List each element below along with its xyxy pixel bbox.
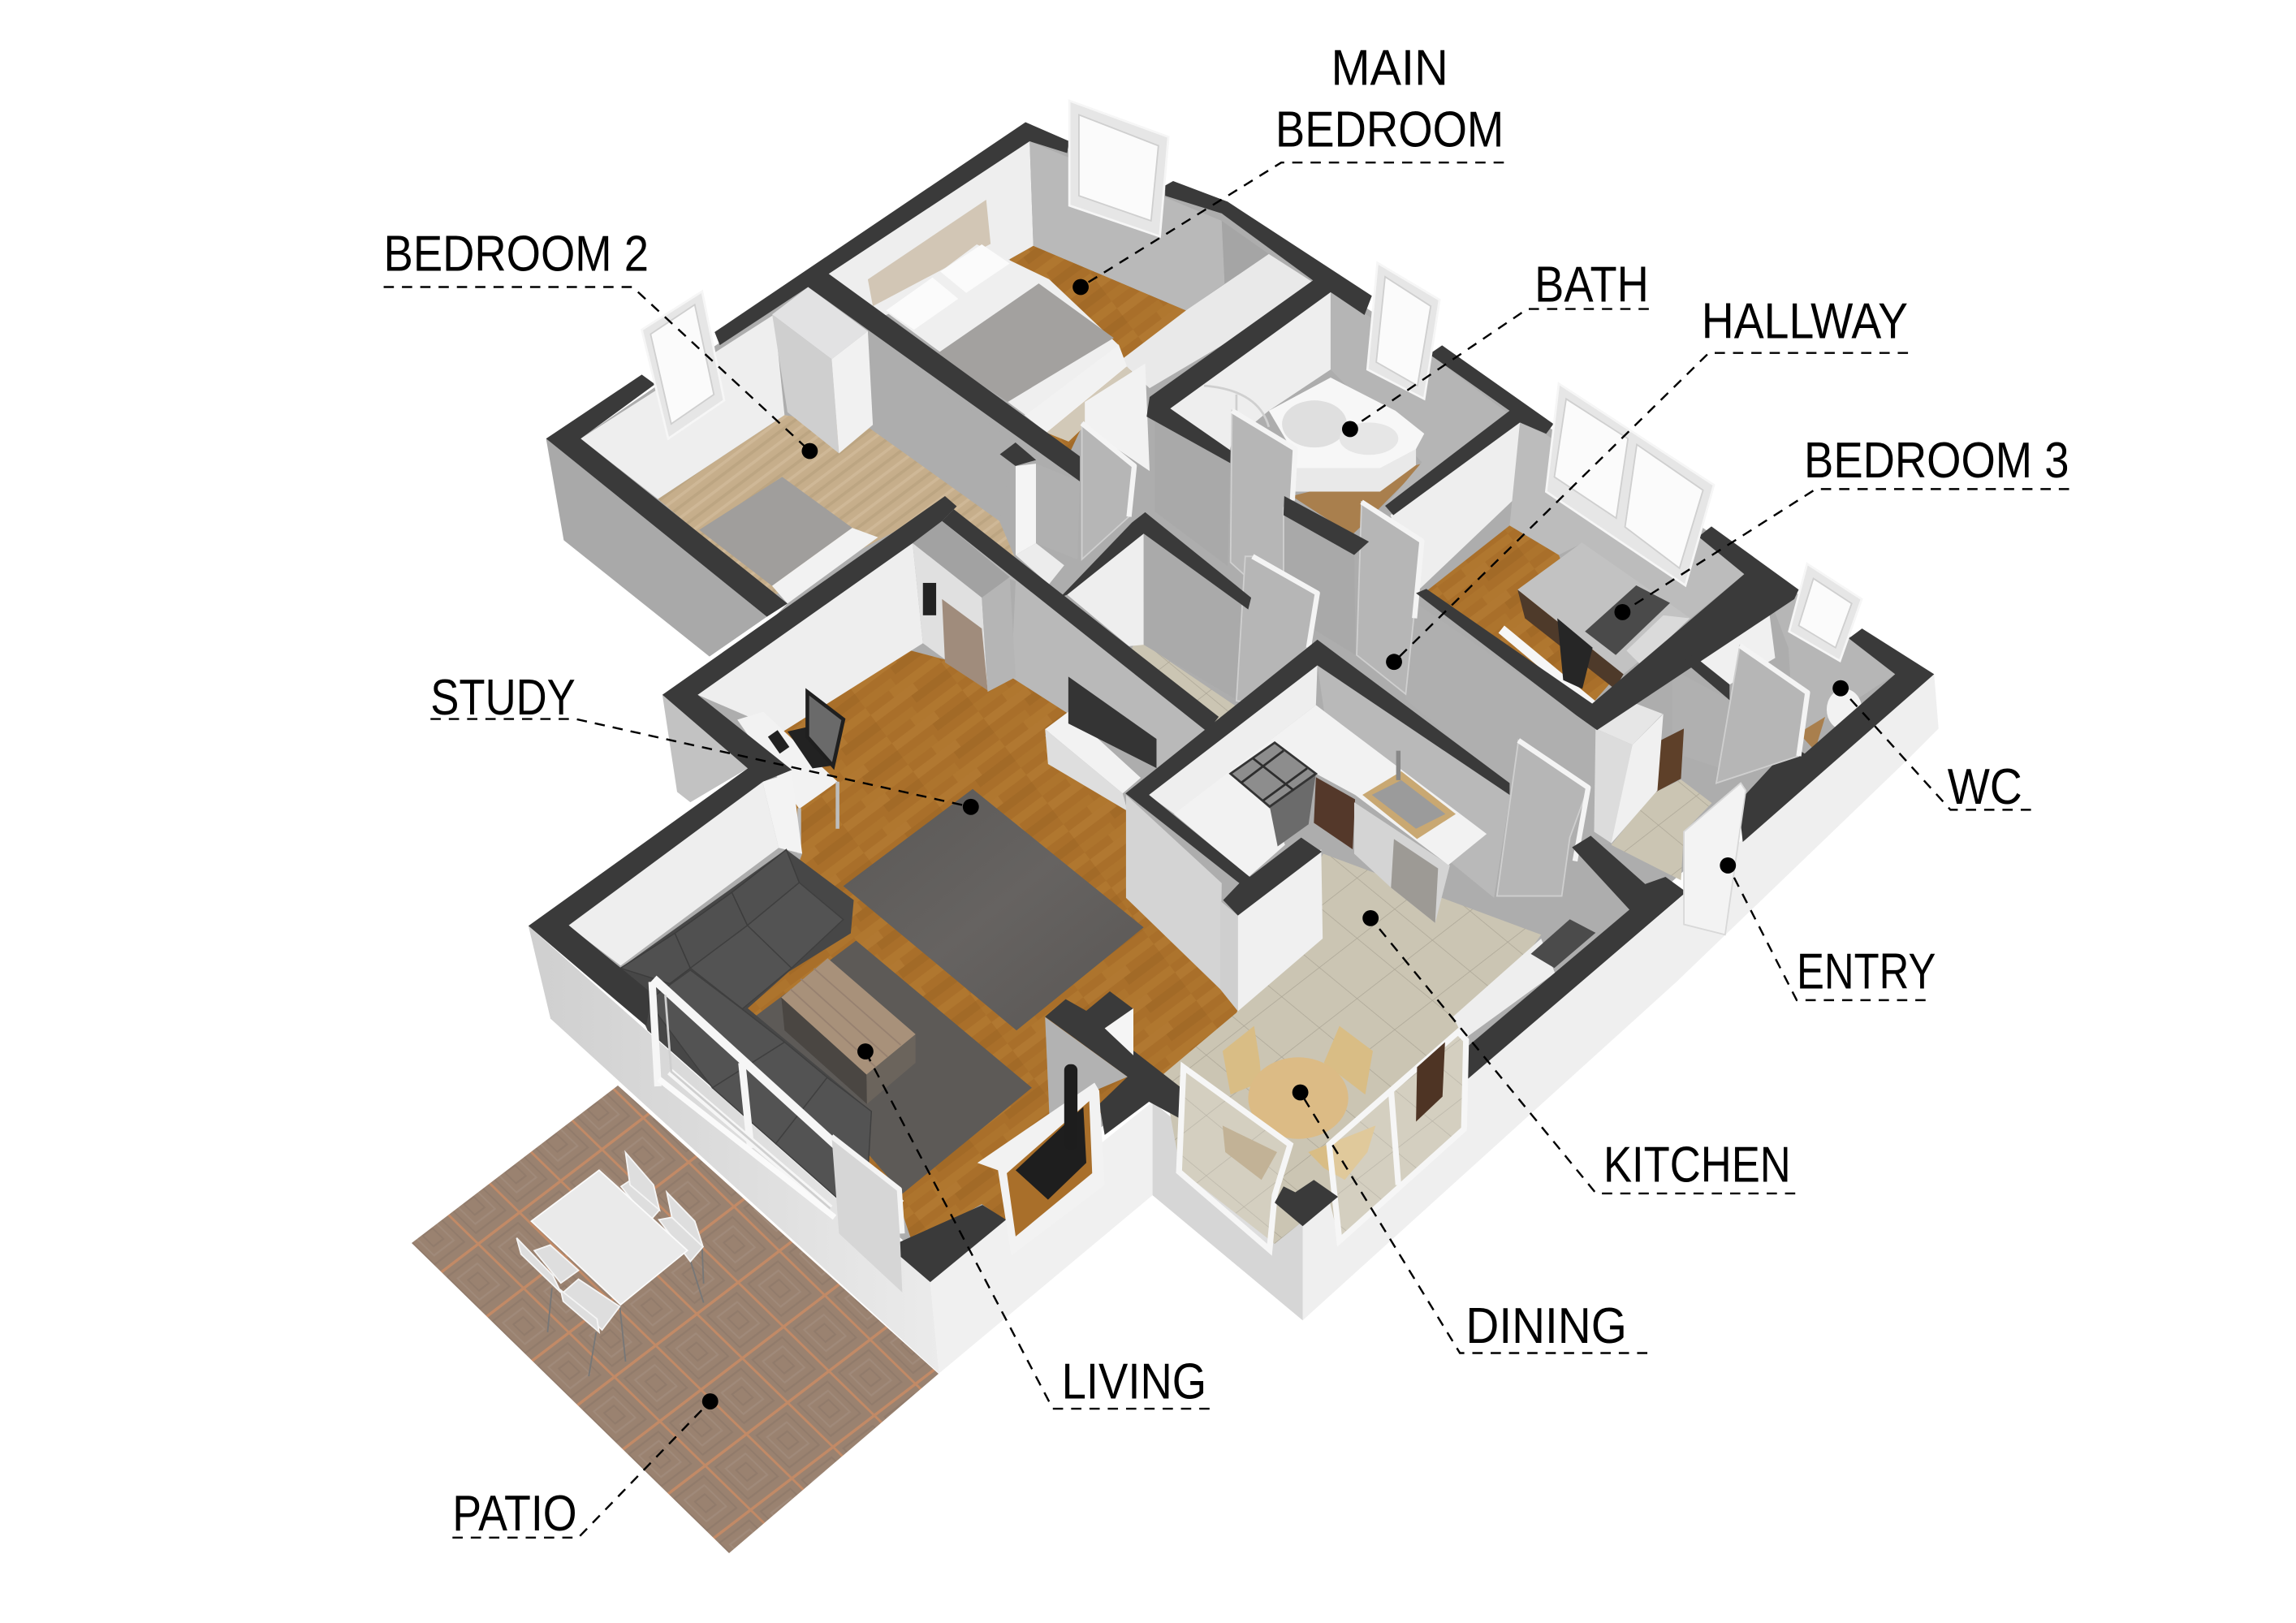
window: bedroom 3 [1546, 383, 1714, 585]
label: dining: DINING [1465, 1298, 1627, 1354]
label: bedroom 3: BEDROOM 3 [1804, 433, 2069, 489]
room: closet floor [1129, 639, 1236, 728]
side wall [868, 334, 1015, 520]
room: kitchen floor [1163, 854, 1541, 1244]
white wall [1391, 422, 1522, 589]
cap: bedroom 2 corner [546, 374, 788, 617]
wall caps [529, 122, 1934, 1282]
living room walls and furniture [568, 521, 1207, 1200]
room: entry floor [1612, 779, 1712, 880]
lower seat cushion [648, 970, 784, 1088]
label: bath: BATH [1534, 257, 1649, 313]
windows and doors [641, 101, 1862, 1293]
chair [516, 1238, 579, 1293]
round table [1248, 1057, 1349, 1139]
main bedroom walls and furniture [829, 141, 1320, 442]
bed [868, 200, 1137, 442]
bedroom 2 walls and furniture [580, 287, 1080, 603]
hallway and door walls [1067, 364, 1610, 848]
cap: living to hall [942, 509, 1219, 732]
long hall wall [1405, 596, 1610, 848]
exterior wall: dining side [1153, 1102, 1303, 1320]
right wall [923, 521, 1207, 768]
label: bedroom 3 [1614, 433, 2069, 620]
label: bedroom 2 [384, 227, 818, 459]
label: bedroom 2: BEDROOM 2 [384, 227, 649, 283]
bathtub [1269, 378, 1424, 492]
cap: bath lower [1284, 496, 1369, 555]
chair [1223, 1026, 1262, 1094]
exterior wall: living room front [930, 1102, 1153, 1374]
label: patio: PATIO [452, 1486, 577, 1542]
window: living small [978, 1064, 1105, 1255]
service column [1594, 700, 1684, 844]
interior underlay [568, 132, 1899, 1266]
WC walls and fixtures [1672, 589, 1895, 768]
closet gray wall [1144, 533, 1248, 706]
hob counter [1453, 939, 1555, 1039]
back wall [1170, 292, 1331, 453]
lower cabinet and dishwasher [1314, 777, 1450, 923]
label: study [430, 670, 979, 815]
cap: kitchen surround [1125, 640, 1322, 916]
bed [699, 477, 878, 603]
sink [1362, 751, 1456, 839]
back wall [829, 141, 1034, 324]
bath partition [1154, 417, 1230, 566]
label: hallway: HALLWAY [1702, 294, 1908, 350]
wall column [762, 773, 802, 854]
counter top [1174, 705, 1487, 877]
chair [659, 1193, 703, 1262]
window: WC [1789, 563, 1862, 661]
window: bedroom 2 [641, 291, 724, 438]
main rug [844, 789, 1144, 1030]
label: study: STUDY [430, 670, 576, 726]
chair [1324, 1026, 1373, 1094]
kitchen pillar [1220, 849, 1323, 1012]
label: bath [1342, 257, 1649, 437]
label: living [857, 1043, 1210, 1409]
chair [1223, 1125, 1277, 1180]
dining set [1223, 1026, 1375, 1180]
label: dining [1293, 1085, 1647, 1354]
lower seat cushion [712, 1042, 827, 1144]
door: closet [1236, 556, 1318, 704]
lower seat cushion [775, 1077, 871, 1200]
cap: bedroom 2 stub [1000, 442, 1036, 466]
cap: bedroom 3 surround [1416, 526, 1798, 730]
chair [561, 1279, 619, 1332]
patio dining set [516, 1153, 704, 1376]
label: WC: WC [1948, 759, 2022, 815]
kitchen walls and fittings [1126, 665, 1684, 1039]
room: bedroom 2 floor [658, 415, 1016, 596]
label: entry [1720, 857, 1936, 1000]
WC door [1716, 645, 1807, 783]
cap: WC outer [1738, 628, 1934, 842]
side wall [1331, 292, 1509, 506]
hob [1531, 919, 1595, 968]
room: main bedroom floor [1010, 246, 1186, 452]
kitchen outer side wall [1126, 795, 1222, 989]
TV unit [1045, 676, 1156, 811]
chair [621, 1153, 659, 1222]
back wall white [1148, 665, 1318, 814]
cap: main bedroom to bath [1146, 181, 1372, 463]
bed [1517, 542, 1690, 688]
table [531, 1170, 688, 1305]
label: kitchen [1362, 910, 1795, 1194]
door: bath [1231, 411, 1295, 611]
kitchen door [1497, 740, 1588, 896]
cap: WC divider [1683, 655, 1729, 700]
bath walls and fixtures [1170, 292, 1509, 506]
cap: north outer wall [714, 122, 1080, 481]
cap: dining corner [1275, 1180, 1338, 1226]
door panel white [1085, 364, 1150, 471]
wardrobe [772, 287, 873, 453]
label: main bedroom [1072, 41, 1504, 295]
exterior wall: bedroom 2 side [546, 438, 767, 657]
door bedroom hall [1082, 423, 1134, 559]
label: kitchen: KITCHEN [1603, 1137, 1791, 1194]
label: patio [452, 1393, 719, 1542]
stub wall under living cap [1045, 1017, 1128, 1119]
cap: kitchen back [1307, 640, 1509, 795]
entry door [1684, 783, 1746, 935]
room: living floor [736, 650, 1240, 1244]
exterior wall: long right facade [1303, 674, 1939, 1320]
coffee table [781, 958, 916, 1104]
label: hallway [1386, 294, 1908, 670]
window: dining left [1179, 1067, 1290, 1250]
back wall [580, 314, 784, 499]
stove [1231, 743, 1316, 846]
cap: study and living upper [529, 496, 956, 1026]
study and living back wall [697, 543, 923, 732]
cap: kitchen right [1464, 835, 1686, 1081]
rug under table [752, 941, 1032, 1194]
back cushion [620, 933, 690, 984]
chair legs [547, 1248, 704, 1376]
labels and leader lines [384, 41, 2069, 1542]
label: main bedroom: MAIN [1331, 41, 1448, 97]
cap: closet [1060, 512, 1251, 610]
patio paving [412, 1086, 939, 1553]
floor plan model [516, 101, 1939, 1376]
label: entry: ENTRY [1797, 943, 1936, 999]
sliding door: living room [652, 979, 901, 1217]
seat cushion [748, 883, 844, 968]
seat cushion [690, 926, 792, 1009]
cap: living to dining stub [1045, 991, 1182, 1135]
window: main bedroom [1069, 101, 1168, 236]
cap: bath to bedroom 3 [1385, 345, 1553, 516]
desk and chair [1499, 618, 1599, 710]
refrigerator [912, 521, 1016, 692]
back wall [1509, 422, 1744, 618]
room: bath floor [1292, 463, 1424, 535]
window: dining right [1329, 1032, 1466, 1241]
label: living: LIVING [1062, 1353, 1206, 1409]
hall partition [1284, 516, 1356, 655]
closet top slab [1120, 254, 1320, 388]
chair [1308, 1125, 1375, 1180]
patio door panel [831, 1137, 902, 1293]
back cushion [675, 892, 748, 968]
shower glass [1204, 386, 1269, 442]
back cushion [732, 849, 799, 926]
cap: living front corner [889, 1205, 1006, 1282]
bedroom 3 walls and furniture [1391, 422, 1744, 710]
side wall [1029, 141, 1224, 311]
label: WC [1832, 680, 2031, 815]
back wall gray [1318, 665, 1510, 898]
exterior wall: living room side [529, 926, 939, 1374]
exterior wall: study side [662, 695, 748, 802]
label: main bedroom: BEDROOM [1275, 101, 1504, 158]
study desk and chair [737, 692, 844, 854]
door: bedroom 3 [1357, 502, 1422, 694]
nook [1016, 464, 1036, 555]
room: bedroom 3 floor [1426, 525, 1610, 704]
notch white wall [1105, 1008, 1133, 1055]
closet white wall [1067, 533, 1144, 646]
window: bath [1367, 263, 1439, 399]
corner sofa [619, 849, 871, 1200]
